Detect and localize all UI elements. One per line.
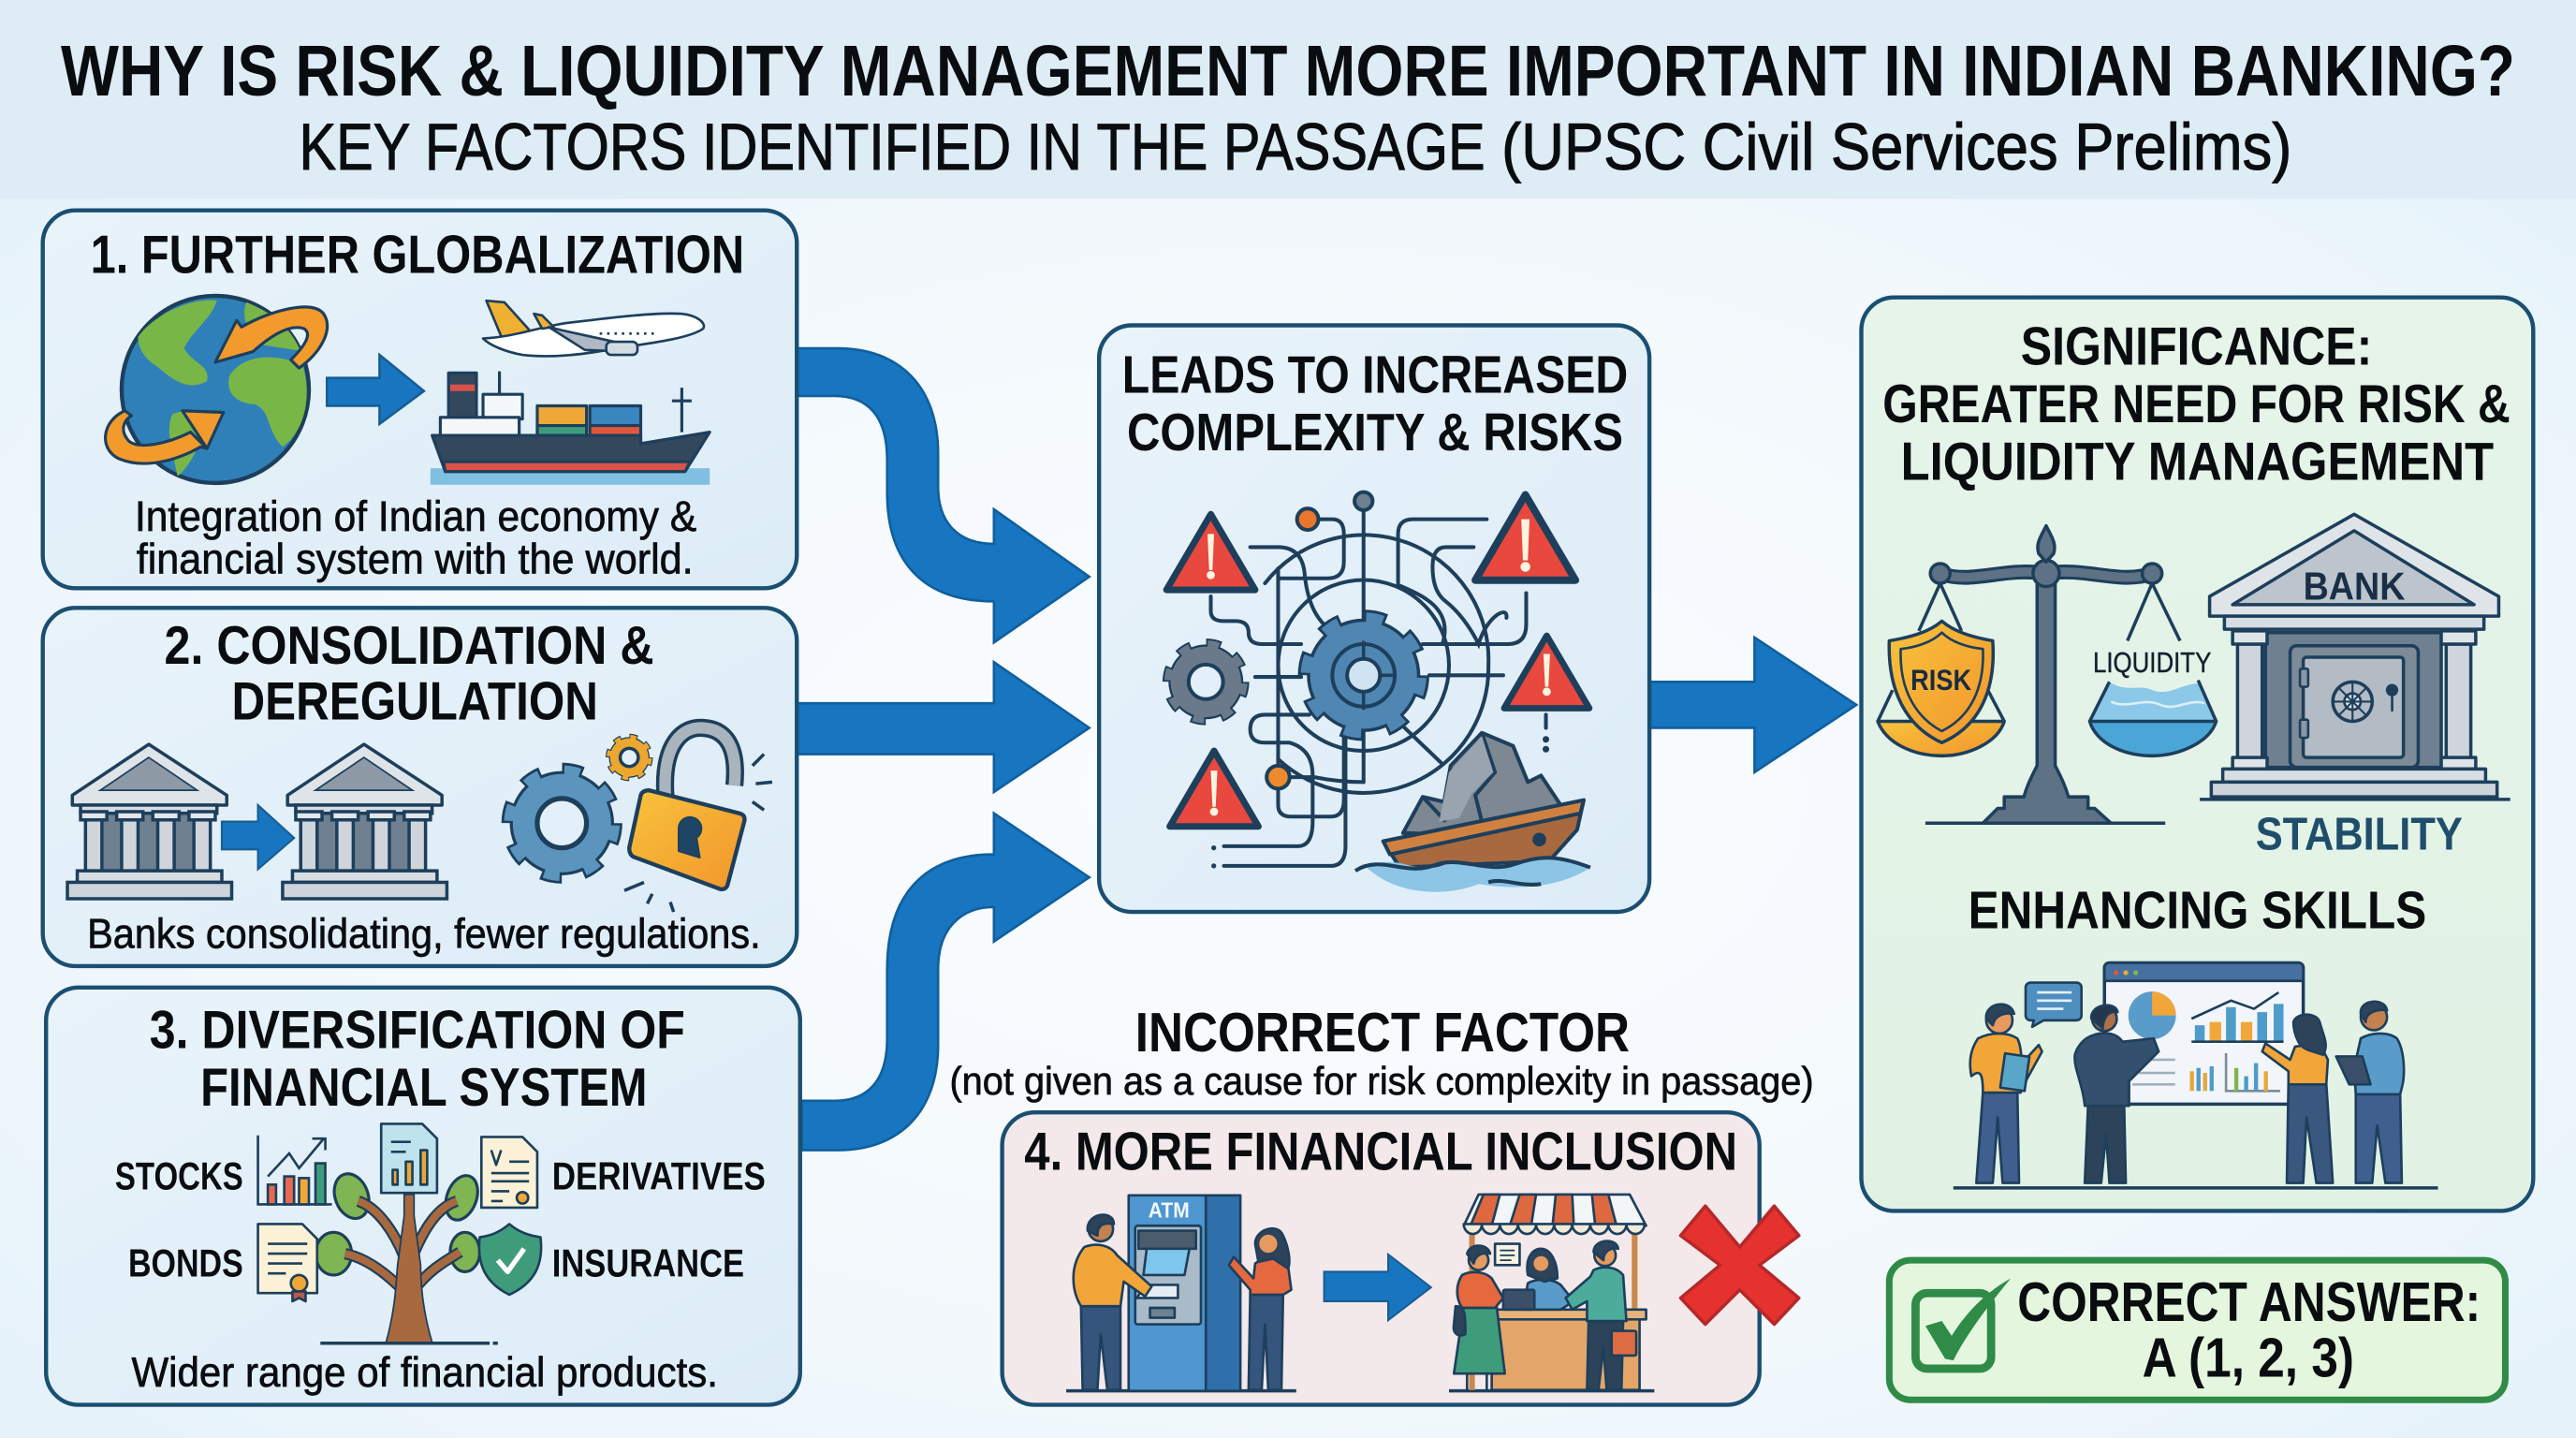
icon: warning triangle top left: [1166, 514, 1255, 590]
icon: ATM with two customers: ATM: [1149, 1197, 1190, 1222]
icon: airplane: [483, 301, 704, 356]
icon: warning triangle bottom left: [1170, 751, 1258, 827]
label: insurance: INSURANCE: [552, 1242, 744, 1285]
icon: warning triangle top right: [1475, 495, 1575, 580]
person woman: [2262, 1015, 2333, 1183]
icon: ATM with two customers: [1066, 1196, 1296, 1391]
icon: globe with orange arrows: [106, 296, 328, 483]
panel: further globalization: [43, 211, 797, 588]
arrow: consolidation to complexity: [797, 662, 1090, 792]
heading: factor 3: 3. DIVERSIFICATION OF: [150, 1001, 685, 1061]
panel: increased complexity and risks: [1099, 325, 1649, 912]
panel: significance: [1862, 298, 2533, 1211]
icon: second bank: [283, 744, 446, 899]
label: derivatives: DERIVATIVES: [552, 1155, 766, 1198]
icon: speech bubble: [2026, 983, 2082, 1027]
heading: complexity line 2: COMPLEXITY & RISKS: [1127, 403, 1623, 462]
arrow: ATM to banking kiosk: [1325, 1255, 1431, 1320]
label: bank: BANK: [2304, 565, 2406, 609]
text: correct answer label: CORRECT ANSWER:: [2017, 1270, 2481, 1333]
icon: green check box: [1915, 1278, 2011, 1369]
icon: central gear: [1307, 619, 1420, 732]
icon: circuit nodes: [1211, 492, 1548, 869]
panel: more financial inclusion: [1003, 1112, 1799, 1405]
icon: cargo ship: [431, 372, 710, 485]
heading: complexity: LEADS TO INCREASED: [1122, 345, 1628, 404]
icon: derivatives document: [481, 1137, 537, 1208]
icon: banking kiosk with people: [1449, 1195, 1654, 1391]
label: bonds: BONDS: [128, 1242, 243, 1285]
person in blue: [2336, 1002, 2404, 1183]
icon: product tree: [315, 1169, 498, 1343]
callout: correct answer: [1889, 1260, 2505, 1400]
panel: diversification of financial system: [46, 988, 800, 1405]
heading: factor 3 line 2: FINANCIAL SYSTEM: [200, 1058, 648, 1118]
arrow: diversification to complexity: [802, 814, 1090, 1151]
heading: factor 4: 4. MORE FINANCIAL INCLUSION: [1024, 1123, 1737, 1182]
icon: liquidity bowl: [2089, 681, 2217, 756]
icon: risk shield: [1889, 621, 1993, 742]
icon: insurance shield: [479, 1224, 541, 1295]
caption: factor 1: Integration of Indian economy &: [135, 492, 696, 540]
icon: red cross mark: [1680, 1206, 1799, 1325]
icon: bank with vault: [2200, 514, 2510, 800]
heading: factor 1: 1. FURTHER GLOBALIZATION: [91, 225, 744, 285]
subheading: incorrect factor note: (not given as a cause for risk complexity in passage): [949, 1059, 1814, 1103]
icon: balance scale: [1878, 526, 2180, 823]
heading: incorrect factor: INCORRECT FACTOR: [1135, 1001, 1630, 1064]
icon: analytics dashboard screen: [2104, 962, 2304, 1104]
person in suit: [2074, 1005, 2159, 1183]
heading: significance line 3: LIQUIDITY MANAGEMENT: [1901, 432, 2494, 492]
icon: open padlock: [624, 727, 772, 912]
heading: factor 2: 2. CONSOLIDATION &: [165, 616, 654, 676]
icon: first bank: [67, 744, 232, 899]
subtitle: (UPSC Civil Services Prelims): [1501, 110, 2291, 183]
icon: ship hitting rocks: [1355, 733, 1590, 892]
heading: factor 2 line 2: DEREGULATION: [232, 672, 598, 732]
caption: factor 2: Banks consolidating, fewer regulations.: [87, 911, 761, 958]
arrow: globalization to complexity: [797, 348, 1090, 642]
icon: grey gear: [1168, 644, 1243, 719]
person in orange: [1970, 1005, 2042, 1183]
subtitle: KEY FACTORS IDENTIFIED IN THE PASSAGE: [299, 110, 1486, 183]
arrow: globe to transport: [327, 355, 424, 424]
caption: factor 3: Wider range of financial products.: [131, 1349, 718, 1396]
label: liquidity: LIQUIDITY: [2093, 646, 2211, 679]
icon: small orange gear: [608, 737, 650, 778]
arrow: complexity to significance: [1649, 638, 1856, 772]
label: stability: STABILITY: [2256, 809, 2463, 859]
icon: warning triangle middle right: [1504, 636, 1589, 708]
icon: blue gear: [510, 771, 614, 875]
arrow: bank merger: [222, 805, 294, 869]
caption: factor 1 line 2: financial system with the world.: [137, 536, 694, 583]
icon: team of four analysts: [1954, 1002, 2438, 1188]
text: correct answer value: A (1, 2, 3): [2143, 1327, 2354, 1389]
heading: significance: SIGNIFICANCE:: [2021, 317, 2372, 377]
icon: bond certificate: [258, 1224, 317, 1301]
icon: tangled circuit network: [1211, 501, 1546, 866]
heading: enhancing skills: ENHANCING SKILLS: [1969, 881, 2426, 940]
panel: consolidation and deregulation: [43, 608, 797, 966]
icon: stocks chart: [258, 1136, 332, 1204]
label: risk: RISK: [1910, 663, 1971, 697]
icon: report document: [381, 1123, 437, 1193]
label: stocks: STOCKS: [115, 1155, 243, 1198]
